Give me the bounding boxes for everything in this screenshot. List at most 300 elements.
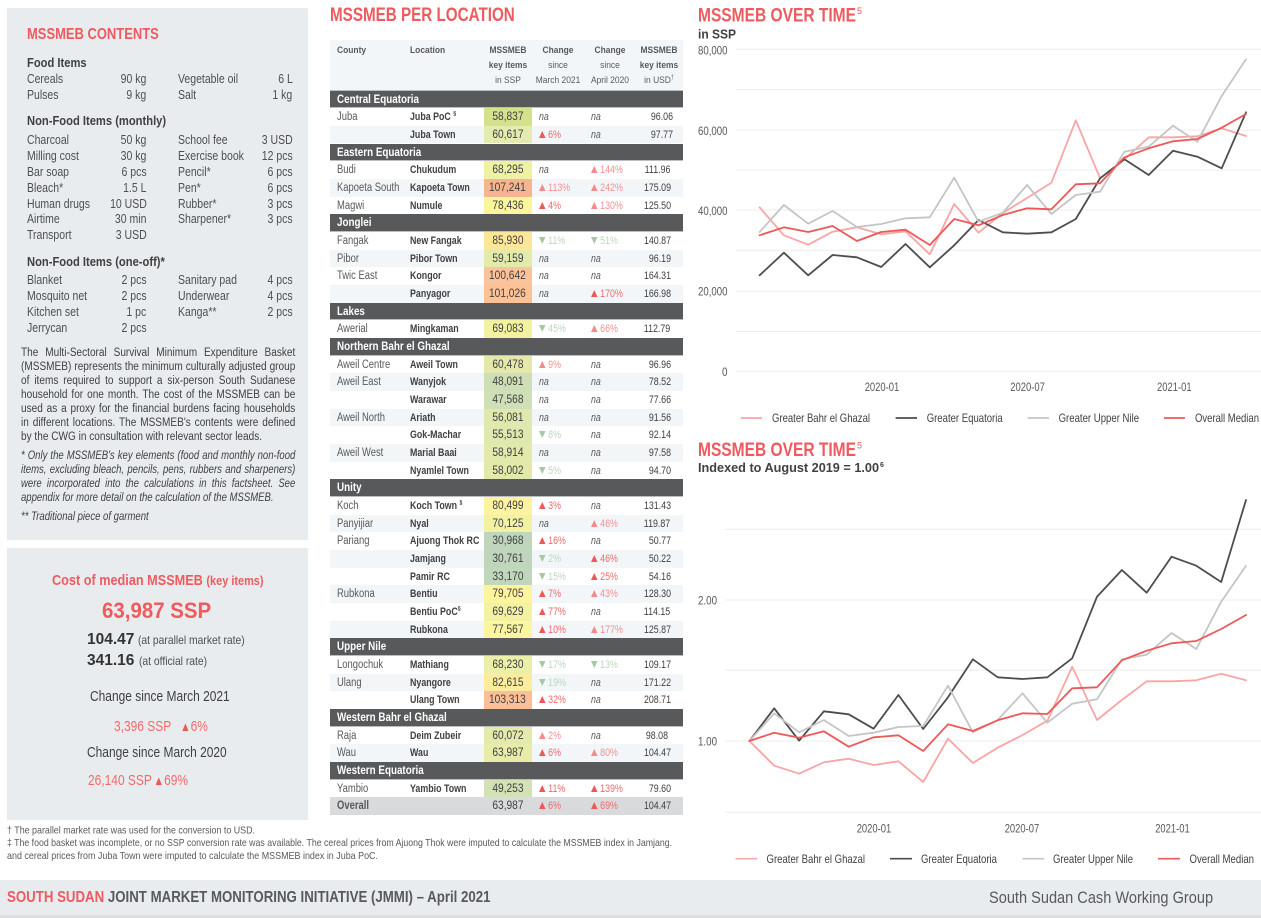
table header: since <box>548 60 568 71</box>
table: MSSMEB per location <box>330 40 683 815</box>
list: food items: Cereals <box>27 71 63 86</box>
list: non-food items monthly: Exercise book <box>178 148 244 162</box>
chart title: 5 <box>857 440 862 450</box>
table: MSSMEB per location: 131.43 <box>644 500 671 512</box>
table: MSSMEB per location: na <box>538 376 548 388</box>
table: MSSMEB per location: Awerial <box>336 323 367 335</box>
text block: MSSMEB definition: household for one month. The cost of the MSSMEB can be <box>21 389 295 401</box>
text block: key elements note: appendix for more detail on the calculation of the MSSMEB. <box>21 492 273 504</box>
line: Greater Equatoria <box>749 500 1246 741</box>
table: MSSMEB per location: 80,499 <box>492 498 523 512</box>
table: MSSMEB per location: na <box>590 270 600 282</box>
table: MSSMEB per location: Aweil Town <box>410 359 457 371</box>
table: MSSMEB per location: na <box>538 412 548 424</box>
figure: USD at parallel market rate <box>87 630 244 648</box>
list: non-food items monthly: 1.5 L <box>123 180 146 194</box>
table: MSSMEB per location: Aweil Centre <box>336 359 390 371</box>
list: food items: 9 kg <box>127 87 146 102</box>
table: MSSMEB per location: Mingkaman <box>410 323 458 335</box>
figure: USD at official rate: (at official rate) <box>139 654 207 668</box>
footer title: SOUTH SUDAN JOINT MARKET MONITORING INITIATIVE (JMMI) – April 2021 <box>7 889 491 906</box>
list: non-food items monthly: 3 USD <box>116 226 146 242</box>
table: MSSMEB per location: Nyamlel Town <box>410 465 468 477</box>
table: MSSMEB per location: Pamir RC <box>410 571 449 583</box>
list: food items: Pulses <box>27 87 59 102</box>
list: non-food items monthly: Milling cost <box>27 148 79 162</box>
section: Western Equatoria: Western Equatoria <box>336 763 423 777</box>
table: MSSMEB per location: na <box>538 111 548 123</box>
table: MSSMEB per location: Mathiang <box>410 659 448 671</box>
list: non-food items monthly <box>27 113 292 242</box>
y axis labels <box>698 594 717 748</box>
table: MSSMEB per location: 177% <box>600 624 622 636</box>
list: food items: 6 L <box>278 71 292 86</box>
heading: MSSMEB per location: MSSMEB PER LOCATION <box>330 4 515 26</box>
table: MSSMEB per location: Koch Town § <box>410 499 462 512</box>
section: Northern Bahr el Ghazal <box>330 338 683 356</box>
table row: overall: 6% <box>548 800 560 812</box>
table header: Change <box>542 45 573 56</box>
footnotes: and cereal prices from Juba Town were imputed to calculate the MSSMEB index in Juba PoC. <box>7 850 378 862</box>
list: non-food items one-off: Kanga** <box>178 304 217 318</box>
table: MSSMEB per location: Ariath <box>410 412 435 424</box>
table: MSSMEB per location: na <box>590 606 600 618</box>
table: MSSMEB per location: 66% <box>600 323 617 335</box>
table: MSSMEB per location: Jamjang <box>410 553 445 565</box>
table: MSSMEB per location: na <box>590 535 600 547</box>
table: MSSMEB per location: 125.87 <box>644 624 671 636</box>
heading: cost of median MSSMEB: Cost of median MSSMEB (key items) <box>52 572 264 588</box>
table header: MSSMEB <box>640 45 678 56</box>
table: MSSMEB per location: na <box>538 288 548 300</box>
list: non-food items one-off <box>27 254 292 334</box>
text block: MSSMEB definition: by the CWG in consultation with relevant sector leads. <box>21 431 262 443</box>
list: non-food items one-off: Sanitary pad <box>178 272 237 286</box>
table: MSSMEB per location: 78,436 <box>492 198 523 212</box>
section: Unity <box>330 479 683 497</box>
y axis labels: 1.00 <box>698 734 717 748</box>
table: MSSMEB per location: 32% <box>548 694 565 706</box>
table header: MSSMEB <box>489 45 527 56</box>
table: MSSMEB per location: Nyal <box>410 518 428 530</box>
table: MSSMEB per location: 60,072 <box>492 728 523 742</box>
line: Greater Bahr el Ghazal <box>760 120 1246 254</box>
footer organisation: South Sudan Cash Working Group <box>989 888 1213 907</box>
table: MSSMEB per location: na <box>538 447 548 459</box>
table: MSSMEB per location: Warawar <box>410 394 446 406</box>
table: MSSMEB per location: 96.06 <box>651 111 673 123</box>
table: MSSMEB per location: 46% <box>600 553 617 565</box>
list: food items: 1 kg <box>273 87 292 102</box>
list: non-food items monthly: 3 pcs <box>267 196 292 210</box>
table: MSSMEB per location: Twic East <box>336 270 377 282</box>
table header: April 2020 <box>591 75 629 86</box>
table: MSSMEB per location: Bentiu PoC§ <box>410 605 460 618</box>
table: MSSMEB per location: 113% <box>548 182 570 194</box>
figure: USD at official rate: 341.16 <box>87 652 134 669</box>
y axis labels: 60,000 <box>698 124 728 138</box>
table: MSSMEB per location: Magwi <box>336 200 364 212</box>
table: MSSMEB per location: 77,567 <box>492 622 523 636</box>
table: MSSMEB per location: 30,761 <box>492 551 523 565</box>
table: MSSMEB per location: 58,837 <box>492 109 523 123</box>
table: MSSMEB per location: Kapoeta South <box>336 182 399 194</box>
table: MSSMEB per location: 60,478 <box>492 357 523 371</box>
section: Central Equatoria <box>330 90 683 108</box>
table: MSSMEB per location: 97.77 <box>651 129 673 141</box>
list: non-food items monthly: Transport <box>27 226 72 242</box>
list: non-food items one-off: 2 pcs <box>121 272 146 286</box>
legend <box>741 411 1259 425</box>
figure: USD at parallel market rate: (at parallel market rate) <box>138 632 244 646</box>
table: MSSMEB per location: Rubkona <box>336 588 374 600</box>
table: MSSMEB per location: Numule <box>410 200 442 212</box>
table: MSSMEB per location: Gok-Machar <box>410 429 461 441</box>
table: MSSMEB per location: 112.79 <box>644 323 671 335</box>
table: MSSMEB per location: 47,568 <box>492 392 523 406</box>
table row: overall: 63,987 <box>492 798 523 812</box>
y axis labels: 0 <box>722 365 728 379</box>
x axis labels: 2021-01 <box>1155 822 1190 836</box>
text block: key elements note <box>21 450 296 504</box>
section: Eastern Equatoria <box>330 144 683 161</box>
table: MSSMEB per location: 100,642 <box>489 268 526 282</box>
table: MSSMEB per location: 2% <box>548 553 560 565</box>
list: non-food items monthly: Pen* <box>178 180 201 194</box>
legend: Greater Bahr el Ghazal <box>766 852 865 866</box>
table: MSSMEB per location: 16% <box>548 535 565 547</box>
table: MSSMEB per location: 166.98 <box>644 288 671 300</box>
table: MSSMEB per location: 50.22 <box>649 553 671 565</box>
section: Central Equatoria: Central Equatoria <box>336 92 419 106</box>
table: MSSMEB per location: na <box>590 253 600 265</box>
table: MSSMEB per location: na <box>590 429 600 441</box>
table header: March 2021 <box>535 75 580 86</box>
table: MSSMEB per location: Ajuong Thok RC <box>410 535 479 547</box>
table: MSSMEB per location: na <box>590 500 600 512</box>
table: MSSMEB per location: na <box>590 730 600 742</box>
table: MSSMEB per location: 45% <box>548 323 565 335</box>
table: MSSMEB per location: 3% <box>548 500 560 512</box>
list: non-food items one-off: Kitchen set <box>27 304 79 318</box>
list: non-food items one-off: Underwear <box>178 288 229 302</box>
table: MSSMEB per location: 111.96 <box>645 164 671 176</box>
table: MSSMEB per location: 139% <box>600 783 622 795</box>
table: MSSMEB per location: 11% <box>548 783 565 795</box>
y axis labels <box>698 43 728 379</box>
list: non-food items monthly: Pencil* <box>178 164 211 178</box>
table: MSSMEB per location: Yambio <box>336 783 368 795</box>
section: Lakes: Lakes <box>336 304 364 318</box>
table: MSSMEB per location: 109.17 <box>644 659 671 671</box>
figure: USD at official rate <box>87 652 207 669</box>
table: MSSMEB per location: 119.87 <box>644 518 671 530</box>
list: non-food items monthly: 3 pcs <box>267 210 292 226</box>
table: MSSMEB per location: 68,230 <box>492 657 523 671</box>
table: MSSMEB per location: 58,002 <box>492 463 523 477</box>
list: non-food items one-off: 2 pcs <box>121 288 146 302</box>
list: non-food items monthly: Bleach* <box>27 180 63 194</box>
table: MSSMEB per location: 33,170 <box>492 569 523 583</box>
table: MSSMEB per location: na <box>590 359 600 371</box>
table: MSSMEB per location: Ulang Town <box>410 694 459 706</box>
table: MSSMEB per location: 78.52 <box>649 376 671 388</box>
table: MSSMEB per location: 77.66 <box>649 394 671 406</box>
list: food items <box>27 54 292 102</box>
panel: cost of median MSSMEB <box>7 548 308 820</box>
table: MSSMEB per location: 85,930 <box>492 233 523 247</box>
table: MSSMEB per location: 96.96 <box>649 359 671 371</box>
legend: Greater Upper Nile <box>1053 852 1133 866</box>
table: MSSMEB per location: 6% <box>548 747 560 759</box>
table: MSSMEB per location: Ulang <box>336 677 361 689</box>
list: non-food items monthly: School fee <box>178 132 228 146</box>
table: MSSMEB per location: na <box>590 677 600 689</box>
table row: overall: 104.47 <box>644 800 671 812</box>
list: non-food items monthly: Rubber* <box>178 196 217 210</box>
table: MSSMEB per location: 69,083 <box>492 321 523 335</box>
legend: Greater Upper Nile <box>1059 411 1139 425</box>
label: change since March 2021: Change since March 2021 <box>90 689 230 705</box>
table: MSSMEB per location: na <box>538 518 548 530</box>
list: non-food items monthly: Sharpener* <box>178 210 231 226</box>
table: MSSMEB per location: Koch <box>336 500 358 512</box>
table: MSSMEB per location: 46% <box>600 518 617 530</box>
table: MSSMEB per location: na <box>538 253 548 265</box>
table: MSSMEB per location: 92.14 <box>649 429 671 441</box>
table: MSSMEB per location: Nyangore <box>410 677 450 689</box>
table: MSSMEB per location: Wau <box>410 747 428 759</box>
list: non-food items one-off: Jerrycan <box>27 320 67 334</box>
list: non-food items monthly: Non-Food Items (monthly) <box>27 113 166 128</box>
table: MSSMEB per location: Deim Zubeir <box>410 730 461 742</box>
table: MSSMEB per location: 69,629 <box>492 604 523 618</box>
chart title: 5 <box>857 6 862 16</box>
list: non-food items monthly: Bar soap <box>27 164 69 178</box>
footnotes <box>7 824 672 862</box>
table: MSSMEB per location: 51% <box>600 235 617 247</box>
table: MSSMEB per location: Juba PoC § <box>410 111 456 123</box>
chart title: Indexed to August 2019 = 1.00 <box>698 461 879 475</box>
table: MSSMEB per location: 96.19 <box>649 253 671 265</box>
chart title: 6 <box>880 462 884 469</box>
list: non-food items one-off: 4 pcs <box>267 272 292 286</box>
table: MSSMEB per location: Aweil West <box>336 447 383 459</box>
table: MSSMEB per location: 91.56 <box>649 412 671 424</box>
table: MSSMEB per location: 55,513 <box>492 427 523 441</box>
table row: overall <box>330 797 683 815</box>
heading: MSSMEB contents: MSSMEB CONTENTS <box>27 26 159 43</box>
table: MSSMEB per location: 5% <box>548 465 560 477</box>
legend: Greater Equatoria <box>927 411 1003 425</box>
table: MSSMEB per location: 68,295 <box>492 162 523 176</box>
table: MSSMEB per location: 2% <box>548 730 560 742</box>
table: MSSMEB per location: 79.60 <box>649 783 671 795</box>
table: MSSMEB per location: Longochuk <box>336 659 383 671</box>
x axis labels <box>857 822 1190 836</box>
x axis labels: 2021-01 <box>1157 380 1192 394</box>
table: MSSMEB per location: 170% <box>600 288 622 300</box>
table: MSSMEB per location: 30,968 <box>492 533 523 547</box>
y axis labels: 40,000 <box>698 204 728 218</box>
table: MSSMEB per location: 171.22 <box>644 677 671 689</box>
x axis labels: 2020-01 <box>857 822 892 836</box>
table: MSSMEB per location: Panyijiar <box>336 518 373 530</box>
table: MSSMEB per location: Juba <box>336 111 357 123</box>
text block: MSSMEB definition: The Multi-Sectoral Survival Minimum Expenditure Basket <box>21 347 295 359</box>
table: MSSMEB per location: Pibor Town <box>410 253 457 265</box>
table: MSSMEB per location: 63,987 <box>492 745 523 759</box>
table: MSSMEB per location: 107,241 <box>489 180 526 194</box>
table: MSSMEB per location: 80% <box>600 747 617 759</box>
table: MSSMEB per location: 17% <box>548 659 565 671</box>
table: MSSMEB per location: Juba Town <box>410 129 455 141</box>
text block: MSSMEB definition <box>21 347 296 443</box>
section: Northern Bahr el Ghazal: Northern Bahr el Ghazal <box>336 339 449 353</box>
table: MSSMEB per location: Kapoeta Town <box>410 182 469 194</box>
table: MSSMEB per location: 242% <box>600 182 622 194</box>
list: food items: Vegetable oil <box>178 71 238 86</box>
legend: Greater Equatoria <box>921 852 997 866</box>
table: MSSMEB per location: 104.47 <box>644 747 671 759</box>
table: MSSMEB per location: Aweil North <box>336 412 385 424</box>
table: MSSMEB per location: Budi <box>336 164 355 176</box>
list: non-food items one-off: Non-Food Items (one-off)* <box>27 254 165 268</box>
x axis labels: 2020-01 <box>865 380 900 394</box>
table: MSSMEB per location: 60,617 <box>492 127 523 141</box>
table: MSSMEB per location: 25% <box>600 571 617 583</box>
table: MSSMEB per location: 49,253 <box>492 781 523 795</box>
table: MSSMEB per location: Raja <box>336 730 356 742</box>
list: food items: Food Items <box>27 54 87 70</box>
table: MSSMEB per location: 10% <box>548 624 565 636</box>
list: non-food items monthly: 30 min <box>115 210 146 226</box>
footnotes: † The parallel market rate was used for the conversion to USD. <box>7 824 255 836</box>
list: non-food items one-off: Blanket <box>27 272 62 286</box>
table: MSSMEB per location: 58,914 <box>492 445 523 459</box>
figure: USD at parallel market rate: 104.47 <box>87 630 134 648</box>
table: MSSMEB per location: Rubkona <box>410 624 447 636</box>
table row: overall: Overall <box>336 800 368 812</box>
figure: change since March 2021: 3,396 SSP ▲6% <box>114 719 208 735</box>
list: non-food items one-off: 1 pc <box>127 304 146 318</box>
list: non-food items one-off: 2 pcs <box>121 320 146 334</box>
table: MSSMEB per location: 70,125 <box>492 516 523 530</box>
table: MSSMEB per location: Bentiu <box>410 588 437 600</box>
table header: key items <box>489 60 527 71</box>
line: Overall Median <box>749 615 1246 751</box>
list: non-food items monthly: 3 USD <box>262 132 292 146</box>
table: MSSMEB per location: na <box>590 465 600 477</box>
table header <box>330 40 683 90</box>
table: MSSMEB per location: Fangak <box>336 235 368 247</box>
table: MSSMEB per location: na <box>590 394 600 406</box>
table: MSSMEB per location: 19% <box>548 677 565 689</box>
table: MSSMEB per location: 6% <box>548 129 560 141</box>
table: MSSMEB per location: 15% <box>548 571 565 583</box>
section: Upper Nile: Upper Nile <box>336 639 386 653</box>
line: Overall Median <box>760 114 1246 245</box>
section: Western Equatoria <box>330 762 683 780</box>
chart title: MSSMEB OVER TIME <box>698 439 856 461</box>
table: MSSMEB per location: 79,705 <box>492 586 523 600</box>
table header: in SSP <box>495 75 521 86</box>
list: non-food items one-off: 2 pcs <box>267 304 292 318</box>
table: MSSMEB per location: 43% <box>600 588 617 600</box>
table: MSSMEB per location: Yambio Town <box>410 783 466 795</box>
chart title <box>698 439 884 475</box>
section: Eastern Equatoria: Eastern Equatoria <box>336 144 421 158</box>
table: MSSMEB per location: Kongor <box>410 270 441 282</box>
line: Greater Equatoria <box>760 112 1246 275</box>
table header: since <box>600 60 620 71</box>
section: Western Bahr el Ghazal <box>330 709 683 727</box>
table: MSSMEB per location: 114.15 <box>644 606 671 618</box>
table: MSSMEB per location: 103,313 <box>489 692 526 706</box>
chart title <box>698 4 862 42</box>
text block: key elements note: were incorporated into the calculations in this factsheet. See <box>21 478 295 490</box>
list: non-food items monthly: 10 USD <box>110 196 146 210</box>
text block: key elements note: * Only the MSSMEB's key elements (food and monthly non-food <box>21 450 295 462</box>
table: MSSMEB per location: 144% <box>600 164 622 176</box>
table: MSSMEB per location: New Fangak <box>410 235 461 247</box>
text block: MSSMEB definition: used as a proxy for the financial burdens facing households <box>21 403 295 415</box>
table header: in USD† <box>644 74 674 86</box>
chart: MSSMEB over time in SSP <box>698 4 1261 425</box>
table: MSSMEB per location: Pariang <box>336 535 369 547</box>
table: MSSMEB per location: 101,026 <box>489 286 526 300</box>
section: Unity: Unity <box>336 480 361 494</box>
table: MSSMEB per location: 94.70 <box>649 465 671 477</box>
table: MSSMEB per location: Pibor <box>336 253 359 265</box>
footer band <box>0 880 1261 918</box>
table: MSSMEB per location: 4% <box>548 200 560 212</box>
section: Upper Nile <box>330 638 683 656</box>
text block: MSSMEB definition: in different locations. The MSSMEB's contents were defined <box>21 417 295 429</box>
table header: County <box>336 45 366 56</box>
text block: MSSMEB definition: of items required to support a six-person South Sudanese <box>21 375 295 387</box>
table: MSSMEB per location: 50.77 <box>649 535 671 547</box>
line: Greater Bahr el Ghazal <box>749 667 1246 782</box>
list: non-food items one-off: Mosquito net <box>27 288 87 302</box>
figure: median cost in SSP: 63,987 SSP <box>102 598 211 623</box>
table header: Location <box>410 45 445 56</box>
table: MSSMEB per location: 82,615 <box>492 675 523 689</box>
table: MSSMEB per location: 208.71 <box>644 694 671 706</box>
table: MSSMEB per location: 125.50 <box>644 200 671 212</box>
table: MSSMEB per location: 175.09 <box>644 182 671 194</box>
panel: MSSMEB contents <box>7 8 308 540</box>
y axis labels: 80,000 <box>698 43 728 57</box>
table: MSSMEB per location: na <box>538 164 548 176</box>
table: MSSMEB per location: 130% <box>600 200 622 212</box>
table: MSSMEB per location: 56,081 <box>492 410 523 424</box>
list: food items: 90 kg <box>121 71 146 86</box>
table: MSSMEB per location: na <box>590 376 600 388</box>
table: MSSMEB per location: 59,159 <box>492 251 523 265</box>
table: MSSMEB per location: 140.87 <box>644 235 671 247</box>
text block: key elements note: items, excluding bleach, pencils, pens, rubbers and sharpeners) <box>21 464 295 476</box>
list: non-food items monthly: Airtime <box>27 210 60 226</box>
label: change since March 2020: Change since March 2020 <box>87 745 226 761</box>
text block: garment note: ** Traditional piece of garment <box>21 511 148 523</box>
table: MSSMEB per location: na <box>590 447 600 459</box>
section: Jonglei <box>330 214 683 232</box>
x axis labels: 2020-07 <box>1005 822 1040 836</box>
table: MSSMEB per location: na <box>590 129 600 141</box>
list: non-food items monthly: 6 pcs <box>267 164 292 178</box>
list: non-food items monthly: 50 kg <box>121 132 146 146</box>
